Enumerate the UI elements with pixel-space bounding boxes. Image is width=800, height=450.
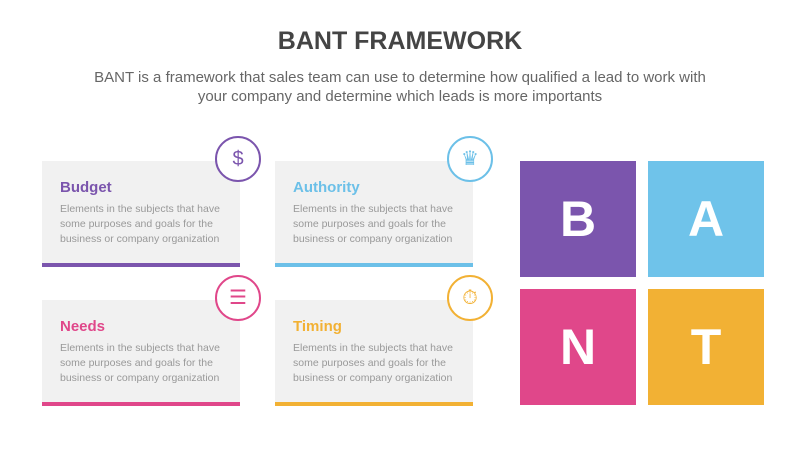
panel: timing: business or company organization bbox=[293, 372, 452, 384]
subtitle bbox=[94, 69, 706, 105]
icon: crown bbox=[447, 136, 493, 182]
panel: authority: Elements in the subjects that have bbox=[293, 203, 453, 215]
square A bbox=[648, 161, 764, 277]
panel: timing: Timing bbox=[293, 318, 342, 335]
square B: B bbox=[560, 191, 596, 247]
square A: A bbox=[688, 191, 724, 247]
square N: N bbox=[560, 319, 596, 375]
panel: authority bbox=[275, 161, 473, 263]
subtitle: your company and determine which leads is more importants bbox=[198, 88, 602, 105]
title: BANT FRAMEWORK bbox=[278, 27, 522, 55]
square T bbox=[648, 289, 764, 405]
panel: budget: Budget bbox=[60, 179, 112, 196]
square N bbox=[520, 289, 636, 405]
panel: budget: Elements in the subjects that have bbox=[60, 203, 220, 215]
panel: timing: Elements in the subjects that have bbox=[293, 342, 453, 354]
panel: authority: Authority bbox=[293, 179, 360, 196]
panel: needs: some purposes and goals for the bbox=[60, 357, 213, 369]
icon: stopwatch bbox=[447, 275, 493, 321]
icon: checklist bbox=[215, 275, 261, 321]
square T: T bbox=[691, 319, 721, 375]
icon: budget bbox=[215, 136, 261, 182]
panel: needs: business or company organization bbox=[60, 372, 219, 384]
icon: stopwatch: ⏱ bbox=[462, 287, 478, 309]
panel: needs bbox=[42, 300, 240, 402]
panel: needs: Elements in the subjects that have bbox=[60, 342, 220, 354]
square B bbox=[520, 161, 636, 277]
panel: authority: some purposes and goals for the bbox=[293, 218, 446, 230]
panel: needs: Needs bbox=[60, 318, 105, 335]
panel: budget: business or company organization bbox=[60, 233, 219, 245]
panel: authority: business or company organization bbox=[293, 233, 452, 245]
icon: budget: $ bbox=[232, 148, 244, 170]
subtitle: BANT is a framework that sales team can use to determine how qualified a lead to work with bbox=[94, 69, 706, 86]
panel: budget bbox=[42, 161, 240, 263]
icon: checklist: ☰ bbox=[229, 287, 247, 309]
icon: crown: ♛ bbox=[461, 148, 479, 170]
panel: timing: some purposes and goals for the bbox=[293, 357, 446, 369]
panel: budget: some purposes and goals for the bbox=[60, 218, 213, 230]
panel: timing bbox=[275, 300, 473, 402]
